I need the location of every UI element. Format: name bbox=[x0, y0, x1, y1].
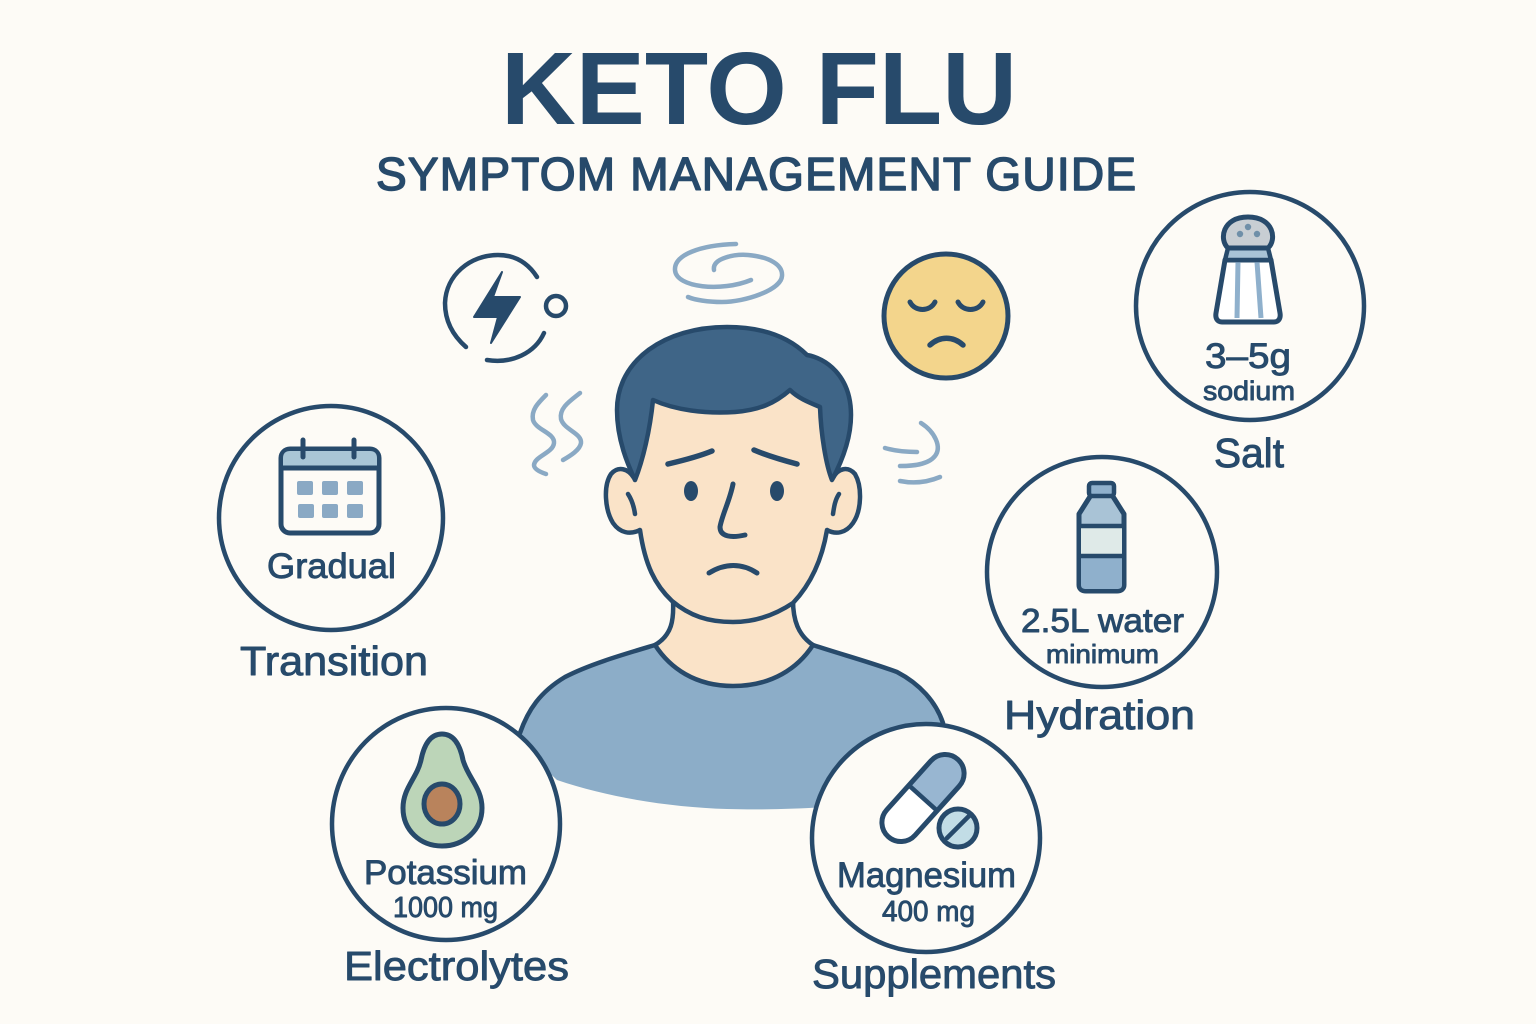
icon: dizziness swirl bbox=[675, 244, 782, 302]
label: hydration: Hydration bbox=[1004, 692, 1195, 738]
mouth bbox=[709, 566, 757, 573]
label: salt: Salt bbox=[1214, 430, 1285, 476]
face skin bbox=[630, 370, 838, 622]
panel: electrolytes bbox=[332, 708, 560, 940]
hair bbox=[617, 327, 851, 480]
panel: transition bbox=[219, 406, 443, 630]
panel: salt bbox=[1136, 192, 1364, 420]
text: magnesium: Magnesium bbox=[837, 856, 1016, 895]
nose bbox=[720, 484, 745, 536]
icon: calendar bbox=[281, 440, 379, 533]
icon: fatigue lightning bolt bbox=[445, 255, 566, 361]
central figure: sick person bbox=[520, 327, 946, 809]
shoulder outline bbox=[520, 645, 943, 733]
jaw outline bbox=[640, 530, 827, 622]
label: electrolytes: Electrolytes bbox=[344, 943, 569, 989]
subtitle: SYMPTOM MANAGEMENT GUIDE bbox=[376, 148, 1136, 200]
shirt bbox=[520, 645, 946, 809]
icon: wavy nausea lines bbox=[533, 393, 581, 474]
icon: capsule and tablet bbox=[874, 747, 977, 849]
title: KETO FLU bbox=[501, 31, 1017, 146]
text: gradual: Gradual bbox=[267, 547, 396, 586]
text: sodium: sodium bbox=[1203, 376, 1295, 406]
icon: avocado bbox=[403, 734, 482, 846]
text: potassium: Potassium bbox=[364, 854, 527, 892]
inner ears bbox=[628, 494, 839, 514]
label: supplements: Supplements bbox=[812, 951, 1056, 997]
text: 3–5g: 3–5g bbox=[1205, 337, 1291, 376]
icon: water bottle bbox=[1079, 483, 1124, 591]
panel: hydration bbox=[987, 457, 1217, 687]
text: 400 mg: 400 mg bbox=[882, 896, 975, 928]
neck outline and collar bbox=[655, 600, 813, 686]
panel: supplements bbox=[812, 724, 1040, 952]
left ear bbox=[606, 469, 640, 533]
right eye bbox=[770, 481, 784, 501]
neck bbox=[655, 600, 813, 686]
text: 2.5L water: 2.5L water bbox=[1021, 602, 1184, 639]
text: 1000 mg: 1000 mg bbox=[393, 892, 498, 924]
icon: wind lines bbox=[885, 423, 940, 482]
eyebrows bbox=[668, 450, 797, 464]
icon: salt shaker bbox=[1216, 217, 1280, 322]
left eye bbox=[684, 481, 698, 501]
icon: sad face emoji bbox=[884, 254, 1008, 378]
text: minimum: minimum bbox=[1046, 639, 1159, 669]
label: transition: Transition bbox=[240, 638, 428, 684]
right ear bbox=[827, 469, 860, 533]
